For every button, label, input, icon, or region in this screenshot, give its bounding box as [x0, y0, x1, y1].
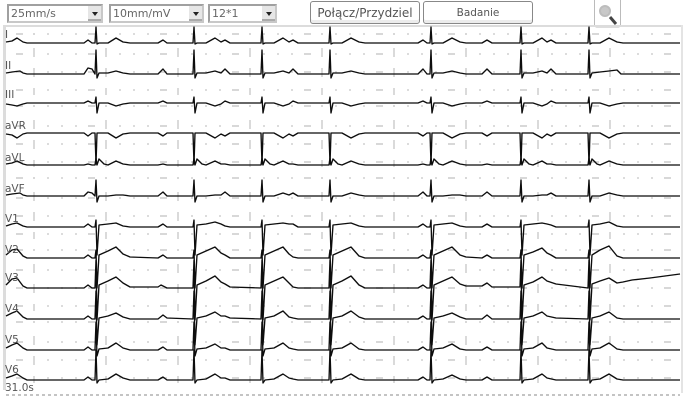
label: aVR: aVR: [5, 120, 26, 132]
dropdown: gain: [109, 4, 204, 23]
dropdown: layout: [208, 4, 277, 23]
trace: lead V6: [6, 350, 680, 383]
label: V6: V6: [5, 364, 19, 376]
label: aVF: aVF: [5, 183, 25, 195]
trace: lead II: [6, 50, 680, 78]
trace: lead V3: [6, 260, 680, 320]
trace: lead aVR: [6, 133, 680, 164]
trace: lead V4: [6, 291, 680, 345]
trace: lead aVL: [6, 158, 680, 165]
label: V2: V2: [5, 244, 19, 256]
trace: lead V2: [6, 246, 680, 288]
trace: lead V5: [6, 322, 680, 356]
icon: magnifier button: [594, 0, 621, 28]
label: V3: V3: [5, 272, 19, 284]
lead labels: [5, 29, 34, 394]
label: V5: V5: [5, 334, 19, 346]
label: time: 31.0s: [5, 382, 34, 394]
dropdown: paper speed: 25mm/s: [11, 7, 56, 20]
dropdown: gain: 10mm/mV: [113, 7, 170, 20]
trace: lead V1: [6, 220, 680, 255]
label: III: III: [5, 89, 14, 101]
toolbar: [7, 0, 621, 28]
dropdown: layout: 12*1: [212, 7, 238, 20]
label: I: I: [5, 29, 8, 41]
label: II: II: [5, 60, 11, 72]
button: examination: Badanie: [457, 7, 499, 19]
button: examination: [423, 1, 533, 24]
button: assign: Połącz/Przydziel: [317, 6, 413, 20]
label: V4: V4: [5, 303, 19, 315]
button: assign: [310, 1, 420, 24]
dropdown: paper speed: [7, 4, 103, 23]
trace: lead III: [6, 97, 680, 113]
trace: lead aVF: [6, 180, 680, 202]
label: aVL: aVL: [5, 152, 25, 164]
label: V1: V1: [5, 213, 19, 225]
trace: lead I: [6, 27, 680, 44]
